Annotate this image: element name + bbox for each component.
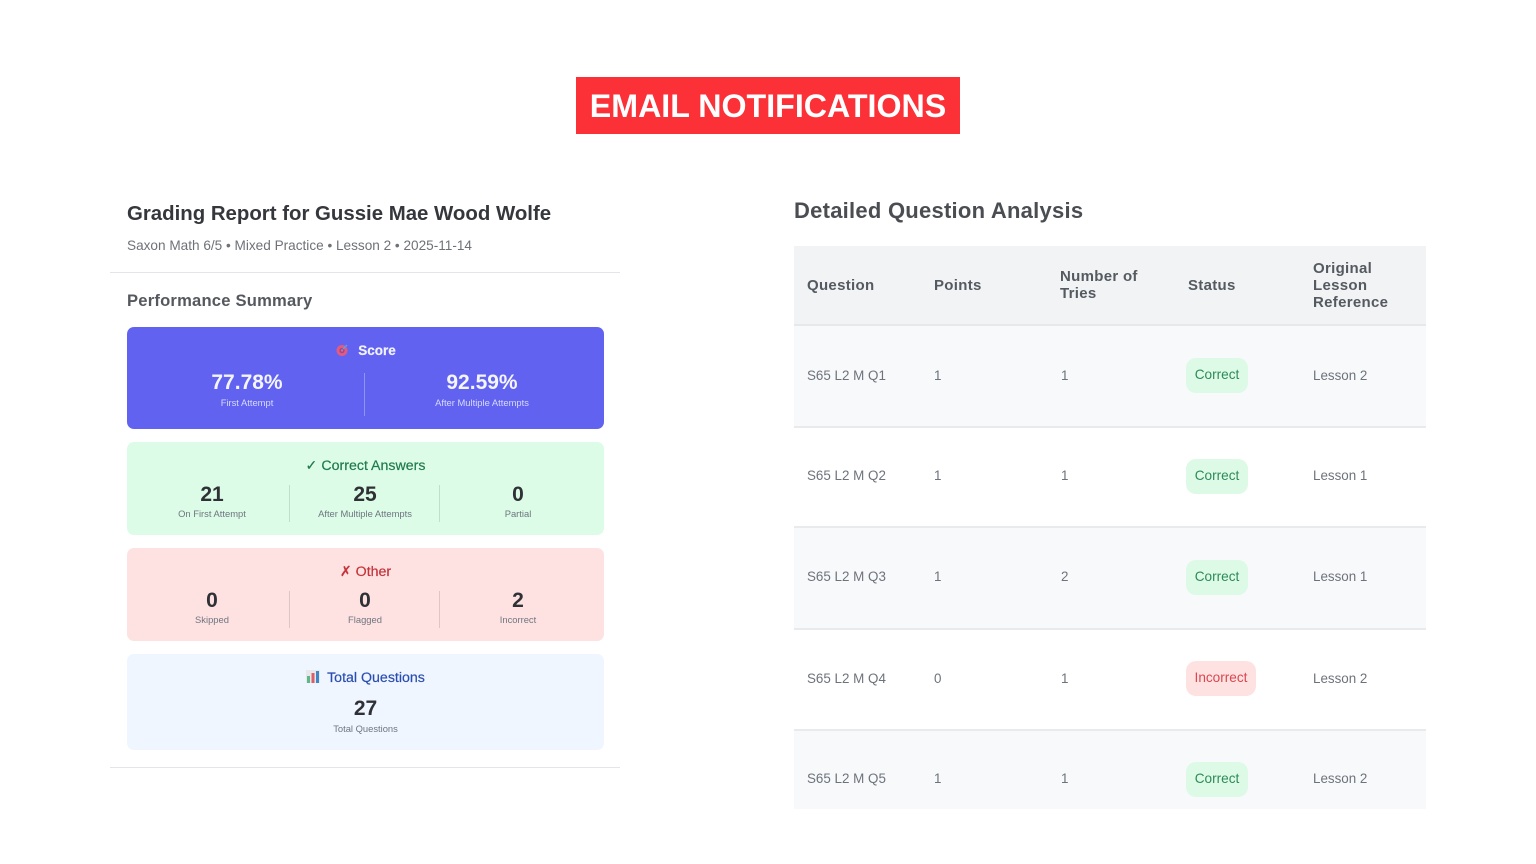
stat: incorrect: 2 <box>512 589 524 612</box>
stat: partial <box>505 483 531 519</box>
stat: total questions <box>333 697 398 734</box>
table header <box>794 246 1426 326</box>
stat: flagged: 0 <box>359 589 371 612</box>
stat: incorrect: Incorrect <box>500 614 536 625</box>
table header: Lesson <box>1313 277 1367 294</box>
score heading: Score <box>358 343 396 358</box>
row: Q3: Correct <box>1195 569 1239 584</box>
row: Q5: Lesson 2 <box>1313 771 1367 786</box>
stat: first attempt: 77.78% <box>211 371 283 394</box>
score heading <box>336 343 396 358</box>
title banner <box>576 77 960 134</box>
row: Q5 <box>794 731 1426 809</box>
row: Q4: 1 <box>1061 671 1068 686</box>
row: Q5: 1 <box>934 771 941 786</box>
report subtitle: Saxon Math 6/5 • Mixed Practice • Lesson 2 • 2025-11-14 <box>127 238 472 253</box>
card: score <box>127 327 604 429</box>
score divider <box>364 373 365 416</box>
title banner: EMAIL NOTIFICATIONS <box>590 88 946 124</box>
row: Q1 <box>794 326 1426 428</box>
row: Q1: 1 <box>934 368 941 383</box>
row: Q3 <box>794 528 1426 630</box>
row: Q1: S65 L2 M Q1 <box>807 368 886 383</box>
row: Q4: 0 <box>934 671 941 686</box>
stat: partial: Partial <box>505 508 531 519</box>
stat: after multiple attempts: After Multiple Attempts <box>318 508 412 519</box>
panel: grading report <box>110 203 620 768</box>
table header: Reference <box>1313 294 1388 311</box>
table header: Number of <box>1060 268 1138 285</box>
row: Q2: 1 <box>1061 468 1068 483</box>
stat: skipped <box>195 589 229 625</box>
stat: skipped: 0 <box>206 589 218 612</box>
card: other <box>127 548 604 641</box>
stat: first attempt: First Attempt <box>221 397 273 408</box>
row: Q4: Lesson 2 <box>1313 671 1367 686</box>
table header: Question <box>807 277 874 294</box>
stat: first attempt <box>211 371 283 408</box>
section heading: detailed question analysis: Detailed Question Analysis <box>794 198 1083 223</box>
table header: Points <box>934 277 982 294</box>
stat: flagged: Flagged <box>348 614 382 625</box>
table header: Status <box>1188 277 1236 294</box>
report title: Grading Report for Gussie Mae Wood Wolfe <box>127 203 551 225</box>
stat: incorrect <box>500 589 536 625</box>
table header: Tries <box>1060 285 1097 302</box>
stat: after multiple attempts: After Multiple Attempts <box>435 397 529 408</box>
stat: on first attempt: On First Attempt <box>178 508 246 519</box>
total heading: Total Questions <box>327 670 425 686</box>
table: question analysis <box>794 246 1426 797</box>
row: Q1: Correct <box>1195 367 1239 382</box>
card: total questions <box>127 654 604 750</box>
row: Q4: S65 L2 M Q4 <box>807 671 886 686</box>
row: Q3: 1 <box>934 569 941 584</box>
row: Q3: S65 L2 M Q3 <box>807 569 886 584</box>
row: Q4 <box>794 630 1426 731</box>
row: Q4: Incorrect <box>1195 670 1247 685</box>
row: Q2: Lesson 1 <box>1313 468 1367 483</box>
stat: after multiple attempts <box>318 483 412 519</box>
bottom divider <box>110 767 620 768</box>
top divider <box>110 272 620 273</box>
row: Q1: 1 <box>1061 368 1068 383</box>
row: Q5: S65 L2 M Q5 <box>807 771 886 786</box>
row: Q1: Lesson 2 <box>1313 368 1367 383</box>
other heading: ✗ Other <box>340 564 391 580</box>
table header: Original <box>1313 260 1372 277</box>
row: Q2: 1 <box>934 468 941 483</box>
correct heading: ✓ Correct Answers <box>306 458 425 474</box>
stat: after multiple attempts <box>435 371 529 408</box>
stat: skipped: Skipped <box>195 614 229 625</box>
stat: flagged <box>348 589 382 625</box>
row: Q2: Correct <box>1195 468 1239 483</box>
card: correct answers <box>127 442 604 535</box>
row: Q3: Lesson 1 <box>1313 569 1367 584</box>
stat: total questions: Total Questions <box>333 723 398 734</box>
section heading: performance summary: Performance Summary <box>127 291 312 310</box>
stat: total questions: 27 <box>354 697 377 720</box>
stat: partial: 0 <box>512 483 524 506</box>
stat: on first attempt <box>178 483 246 519</box>
stat: after multiple attempts: 25 <box>353 483 377 506</box>
stat: after multiple attempts: 92.59% <box>446 371 518 394</box>
stat: on first attempt: 21 <box>200 483 224 506</box>
row: Q5: Correct <box>1195 771 1239 786</box>
row: Q2: S65 L2 M Q2 <box>807 468 886 483</box>
row: Q5: 1 <box>1061 771 1068 786</box>
row: Q3: 2 <box>1061 569 1068 584</box>
row: Q2 <box>794 428 1426 528</box>
